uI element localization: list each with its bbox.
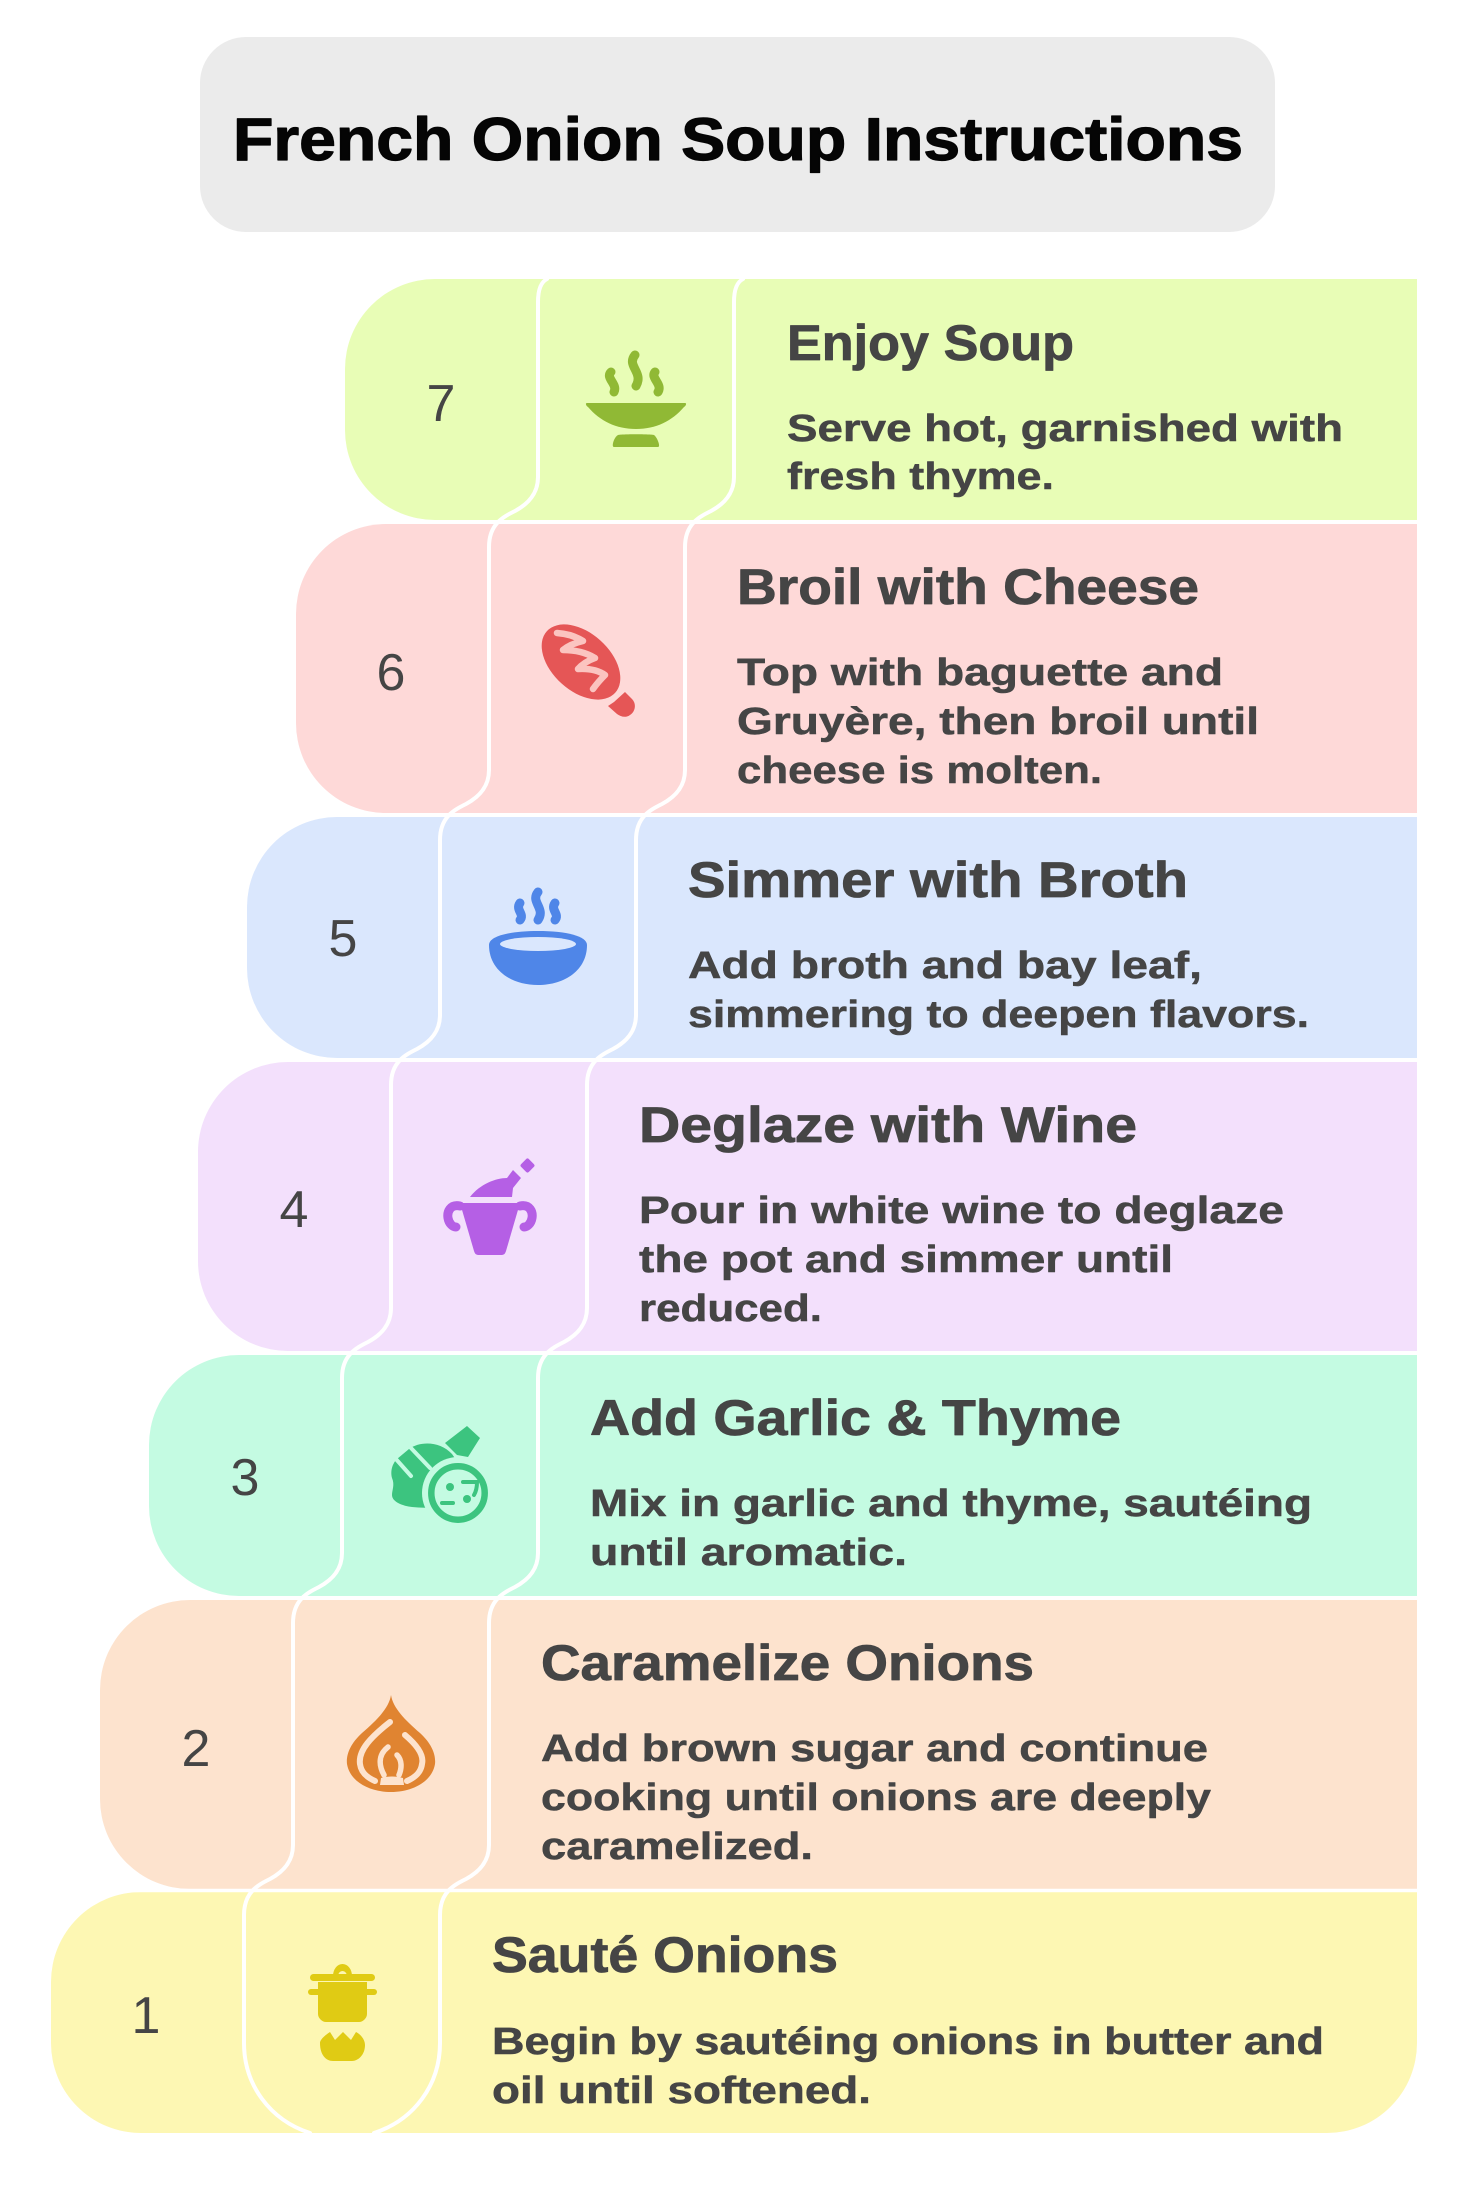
step 5 text: Simmer with Broth [688, 852, 1188, 908]
step 5 text: Add broth and bay leaf, [688, 945, 1202, 987]
panel: step 4 deglaze with wine [198, 1062, 1417, 1351]
step 1 text: Begin by sautéing onions in butter and [492, 2021, 1324, 2063]
step 5 text [688, 852, 1309, 1036]
title panel [200, 37, 1275, 232]
step 2 text: Add brown sugar and continue [541, 1728, 1208, 1770]
step number 4: 4 [280, 1181, 308, 1239]
panel: step 5 simmer with broth [247, 817, 1417, 1058]
step 6 text: Broil with Cheese [737, 559, 1199, 615]
step 4 text: reduced. [639, 1288, 822, 1330]
step number 5: 5 [329, 910, 357, 968]
step 6 text: cheese is molten. [737, 750, 1102, 792]
step 5 text: simmering to deepen flavors. [688, 994, 1309, 1036]
panel: step 1 saute onions [51, 1892, 1417, 2133]
panel: step 2 caramelize onions [100, 1600, 1417, 1889]
icon: bowl with steam [586, 355, 686, 447]
panel: step 7 enjoy soup [345, 279, 1417, 520]
step 6 text [737, 559, 1259, 792]
step 4 text [639, 1097, 1284, 1330]
step 3 text: Mix in garlic and thyme, sautéing [590, 1483, 1312, 1525]
step number 1: 1 [132, 1987, 160, 2045]
step 6 text: Gruyère, then broil until [737, 701, 1259, 743]
step 2 text: cooking until onions are deeply [541, 1777, 1211, 1819]
step 4 text: Pour in white wine to deglaze [639, 1190, 1284, 1232]
icon: pot on flame [308, 1964, 377, 2061]
step 7 text: Serve hot, garnished with [787, 408, 1343, 450]
step 4 text: Deglaze with Wine [639, 1097, 1137, 1153]
step number 2: 2 [182, 1720, 210, 1778]
panel: step 6 broil with cheese [296, 524, 1417, 813]
step number 7: 7 [427, 375, 455, 433]
icon: wine bucket [448, 1158, 535, 1255]
icon: garlic and thyme [391, 1426, 494, 1529]
step 1 text [492, 1927, 1324, 2112]
icon: steaming soup bowl [489, 892, 587, 985]
step 1 text: oil until softened. [492, 2070, 871, 2112]
step 7 text: Enjoy Soup [787, 315, 1074, 371]
step 3 text: Add Garlic & Thyme [590, 1390, 1121, 1446]
step 6 text: Top with baguette and [737, 652, 1223, 694]
icon: baguette with cheese [527, 610, 635, 717]
step 3 text: until aromatic. [590, 1532, 907, 1574]
step 2 text: caramelized. [541, 1826, 813, 1868]
step 7 text [787, 315, 1343, 498]
panel: step 3 add garlic and thyme [149, 1355, 1417, 1596]
step 7 text: fresh thyme. [787, 456, 1054, 498]
step 1 text: Sauté Onions [492, 1927, 838, 1983]
title: French Onion Soup Instructions [233, 106, 1243, 173]
step 4 text: the pot and simmer until [639, 1239, 1173, 1281]
step 2 text: Caramelize Onions [541, 1635, 1034, 1691]
step 3 text [590, 1390, 1312, 1574]
icon: onion [347, 1695, 435, 1792]
step number 6: 6 [377, 644, 405, 702]
step number 3: 3 [231, 1449, 259, 1507]
step 2 text [541, 1635, 1211, 1868]
